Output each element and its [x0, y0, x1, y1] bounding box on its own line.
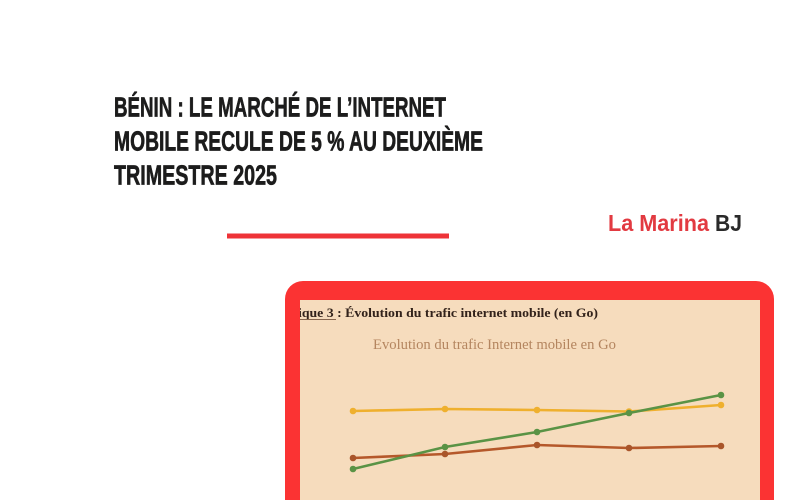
chart title: Evolution du trafic Internet mobile en Go	[373, 337, 616, 353]
brand name: BJ	[715, 210, 742, 236]
chart background	[300, 300, 760, 500]
red divider rule	[227, 234, 449, 238]
green series	[350, 392, 724, 472]
yellow series	[350, 402, 724, 415]
chart caption: ique 3 : Évolution du trafic internet mobile (en Go)	[298, 306, 598, 320]
line chart	[350, 392, 724, 472]
title: MOBILE RECULE DE 5 % AU DEUXIÈME	[114, 126, 483, 156]
title: BÉNIN : LE MARCHÉ DE L’INTERNET	[114, 92, 446, 122]
panel: chart image frame	[285, 281, 774, 500]
title	[114, 92, 483, 190]
brand name: La Marina	[608, 210, 709, 236]
red frame	[285, 281, 774, 500]
title: TRIMESTRE 2025	[114, 160, 277, 190]
brown series	[350, 442, 724, 461]
